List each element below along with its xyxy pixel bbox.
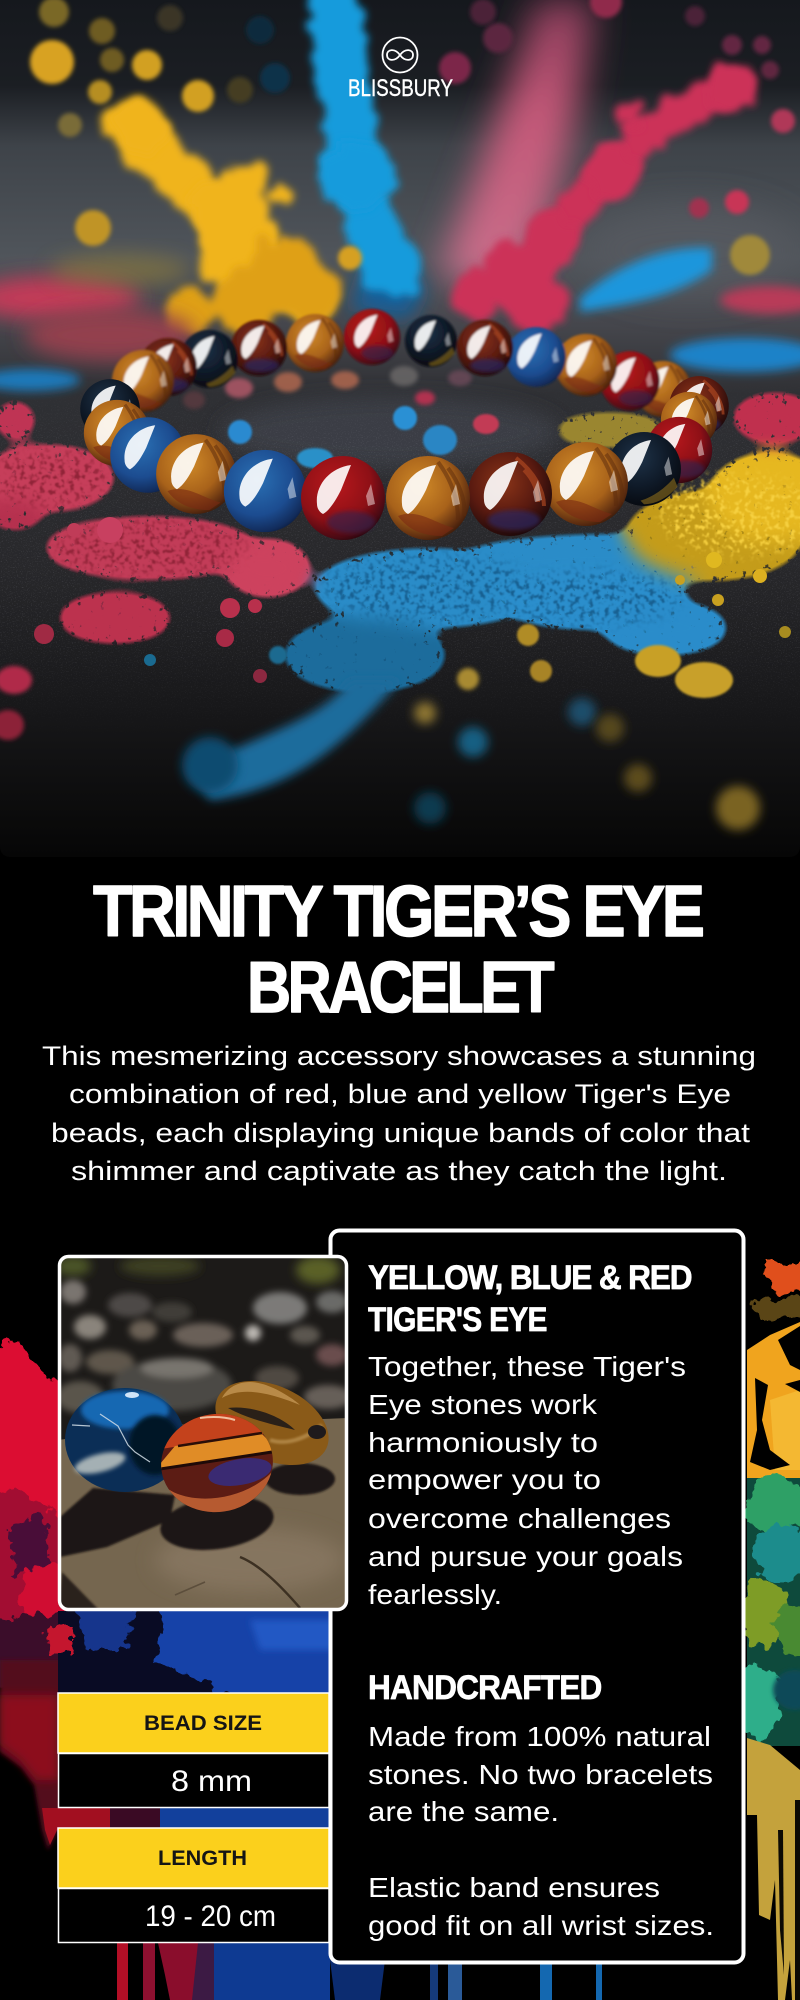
red powder plume	[449, 64, 757, 334]
label: length	[58, 1828, 329, 1888]
front row beads	[80, 376, 729, 540]
blue stone	[65, 1388, 185, 1492]
label: length: LENGTH	[158, 1847, 247, 1870]
text block: handcrafted description	[368, 1721, 714, 1941]
spec table: length	[58, 1828, 329, 1942]
background paint splash: right	[736, 1262, 800, 2000]
blue right powder stripe	[580, 248, 712, 312]
value: 19 - 20 cm: 19 - 20 cm	[145, 1900, 276, 1933]
title: TRINITY TIGER’S EYE	[93, 871, 705, 952]
intro paragraph: This mesmerizing accessory showcases a stunning	[42, 1041, 756, 1071]
text block: stones description: overcome challenges	[368, 1503, 671, 1534]
text block: stones description: fearlessly.	[368, 1579, 502, 1610]
logo: Blissbury: BLISSBURY	[348, 75, 453, 102]
text block: stones description: empower you to	[368, 1464, 601, 1495]
intro paragraph	[42, 1041, 756, 1186]
text block: handcrafted description: are the same.	[368, 1796, 559, 1827]
icon: infinity in circle	[382, 38, 418, 72]
heading: stones: YELLOW, BLUE & RED	[368, 1258, 693, 1296]
text block: stones description: harmoniously to	[368, 1427, 598, 1458]
text block: handcrafted description: Elastic band ensures	[368, 1872, 660, 1903]
text block: stones description: Together, these Tiger's	[368, 1351, 686, 1382]
amber stone	[215, 1381, 329, 1465]
background paint splash: left	[0, 1342, 602, 2000]
banded orange stone	[161, 1414, 273, 1512]
bokeh droplets	[30, 0, 795, 275]
floor-back powder haze	[0, 254, 800, 468]
floor speckle texture	[0, 412, 800, 700]
floor powder: red, blue, yellow	[0, 391, 800, 830]
text block: handcrafted description: good fit on all wrist sizes.	[368, 1910, 714, 1941]
heading: stones: TIGER'S EYE	[368, 1300, 548, 1338]
title	[93, 871, 705, 1028]
text block: handcrafted description: Made from 100% natural	[368, 1721, 711, 1752]
reflections under back beads	[183, 366, 472, 409]
heading: stones	[368, 1258, 693, 1338]
yellow powder plume	[112, 97, 340, 336]
spec table: bead size	[58, 1693, 329, 1808]
logo: Blissbury	[348, 38, 453, 102]
text block: handcrafted description: stones. No two bracelets	[368, 1759, 713, 1790]
value: 19 - 20 cm	[58, 1888, 329, 1942]
label: bead size	[58, 1693, 329, 1753]
stone shadows	[60, 1463, 335, 1557]
blue powder plume	[322, 5, 425, 320]
label: bead size: BEAD SIZE	[144, 1712, 262, 1735]
soft powder underlay	[0, 456, 800, 685]
intro paragraph: beads, each displaying unique bands of color that	[51, 1118, 751, 1148]
bracelet	[80, 309, 729, 540]
hero photo: tiger's eye bracelet on coloured powder	[0, 0, 800, 857]
intro paragraph: combination of red, blue and yellow Tiger's Eye	[69, 1079, 731, 1109]
text block: stones description: and pursue your goals	[368, 1541, 683, 1572]
value: 8 mm: 8 mm	[171, 1765, 252, 1798]
text block: stones description: Eye stones work	[368, 1389, 598, 1420]
photo: three tumbled tiger's eye stones	[55, 1255, 352, 1611]
rock	[58, 1418, 348, 1611]
heading: handcrafted: HANDCRAFTED	[368, 1668, 602, 1706]
pink mist	[440, 0, 595, 286]
panel: stone info	[330, 1230, 744, 1962]
intro paragraph: shimmer and captivate as they catch the light.	[71, 1156, 727, 1186]
title: BRACELET	[247, 948, 555, 1028]
back row beads	[112, 309, 691, 417]
text block: stones description	[368, 1351, 686, 1610]
value: 8 mm	[58, 1754, 329, 1808]
